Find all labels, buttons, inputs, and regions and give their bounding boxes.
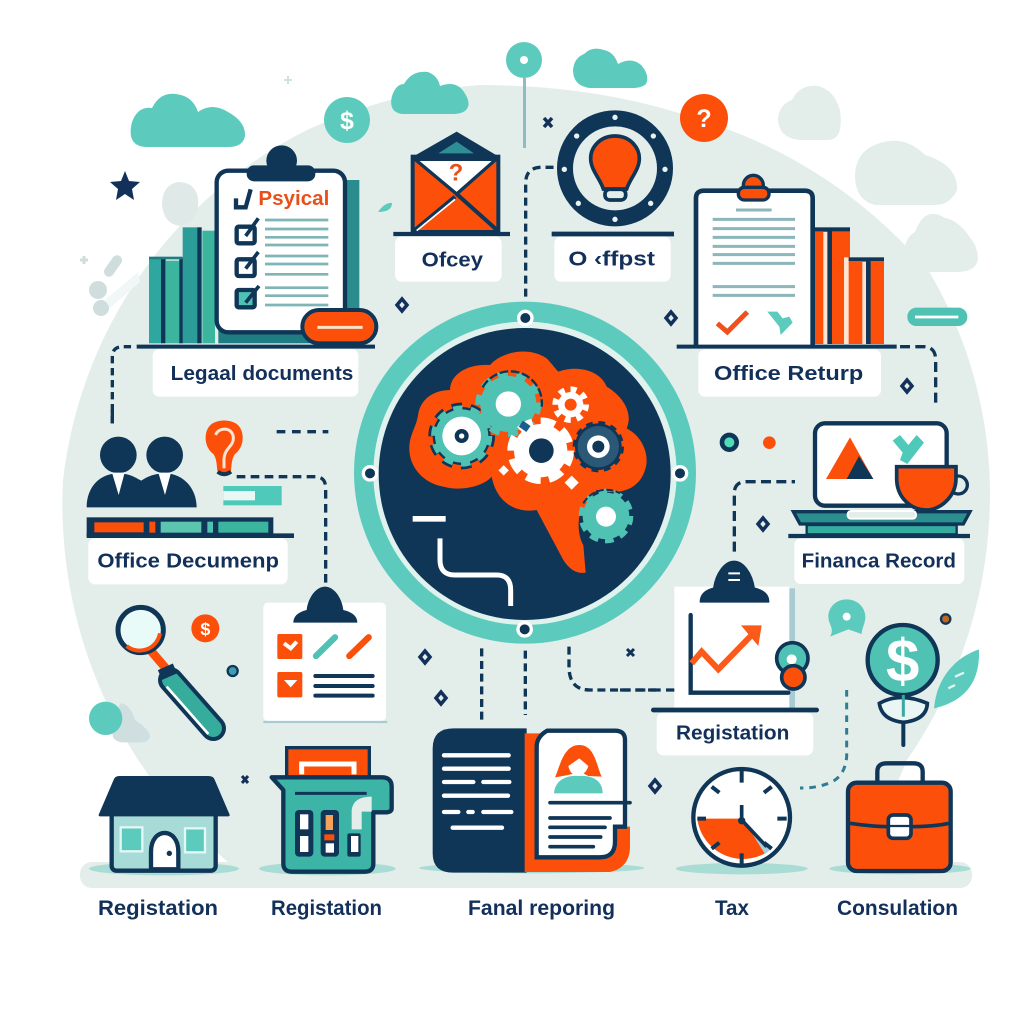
cloud: top centre right teal — [573, 49, 647, 88]
axes — [691, 615, 788, 693]
panel: legal documents — [112, 145, 376, 423]
label: ofcey: Ofcey — [422, 249, 484, 272]
clipboard heading: Psyical — [258, 187, 329, 210]
clipboard — [217, 171, 345, 332]
label: finance record — [794, 538, 964, 584]
shelf — [788, 529, 970, 542]
clip — [738, 175, 769, 200]
panel: office document — [87, 410, 328, 584]
books — [149, 180, 359, 343]
chart logo — [826, 437, 873, 479]
orange spine — [525, 733, 630, 872]
pale sparkle — [284, 76, 292, 84]
icon: coin — [191, 614, 219, 642]
ring — [565, 118, 665, 218]
speech bubble — [828, 599, 865, 637]
label: finance record: Financa Record — [802, 550, 956, 572]
label: registration 1: Registation — [98, 897, 218, 920]
connector short — [277, 427, 328, 437]
orange books — [813, 227, 884, 344]
brain — [409, 352, 647, 573]
label: registration panel: Registation — [676, 722, 789, 744]
dot — [941, 614, 950, 624]
bell clip — [293, 587, 357, 623]
question badge — [680, 94, 728, 142]
pale marks left — [80, 253, 124, 316]
briefcase — [848, 763, 951, 871]
teal check — [893, 435, 924, 464]
house — [100, 777, 228, 871]
connector — [112, 347, 135, 423]
label: registration panel — [657, 713, 813, 755]
label: final reporting: Fanal reporing — [468, 897, 615, 920]
envelope peak — [412, 132, 500, 157]
cloud: pale left — [162, 182, 198, 226]
leaf — [934, 649, 979, 708]
panel: finance record — [722, 423, 970, 584]
envelope folds — [414, 194, 498, 231]
label: tax: Tax — [715, 897, 749, 920]
portrait — [554, 745, 603, 793]
ticks — [316, 637, 335, 656]
bell slots — [728, 573, 740, 580]
star — [110, 171, 140, 200]
chart board — [674, 562, 808, 712]
ground shadows — [89, 862, 396, 875]
connector teal — [800, 690, 847, 788]
label: offpst: O ‹ffpst — [568, 248, 655, 270]
shelf — [677, 341, 897, 353]
icon: dollar badge: $ — [340, 107, 354, 135]
coffee cup — [897, 467, 967, 510]
shelf — [653, 703, 817, 717]
pale streak left — [105, 272, 140, 308]
outer ring — [354, 302, 696, 644]
label: office document: Office Decumenp — [97, 550, 279, 572]
question badge: ? — [696, 105, 712, 133]
dark disc — [379, 328, 671, 620]
light ring — [373, 322, 677, 625]
list lines — [315, 676, 373, 696]
grey cloud — [113, 703, 150, 742]
ring nodes — [363, 311, 687, 636]
trend arrow — [692, 633, 753, 669]
connector — [526, 167, 557, 297]
gear: top teal — [478, 371, 542, 434]
status dots — [722, 435, 776, 450]
cloud: pale right 1 — [778, 86, 841, 140]
white sparks — [498, 465, 579, 490]
book stack — [87, 517, 273, 537]
cover text lines — [444, 755, 511, 828]
small teal leaf — [378, 203, 392, 212]
cloud: top left teal — [131, 94, 245, 147]
folder calculator — [272, 748, 392, 872]
page — [537, 731, 625, 857]
x marker top — [544, 118, 552, 127]
connector upper stub — [107, 410, 117, 423]
gear: dark — [575, 423, 622, 470]
label: ofcey — [395, 237, 502, 282]
label: registration 2: Registation — [271, 897, 382, 920]
bulb — [206, 420, 243, 474]
gear: lower teal — [581, 490, 631, 541]
bulb base — [605, 189, 626, 200]
clipboard — [696, 191, 813, 345]
shelf — [137, 341, 375, 353]
panel: lightbulb — [526, 115, 674, 297]
list lines — [265, 220, 328, 305]
background blob — [62, 85, 990, 872]
dollar plant — [868, 625, 938, 745]
teal bar — [223, 486, 282, 505]
teal circle — [89, 702, 122, 735]
connectors — [482, 647, 660, 722]
orange pill — [302, 310, 376, 343]
dark cover — [433, 728, 527, 873]
teal check — [767, 312, 793, 335]
toggle dots — [777, 643, 808, 674]
checklist board — [263, 587, 387, 722]
panel: lower right icons — [620, 562, 979, 874]
check boxes — [277, 634, 302, 697]
label: legal documents: Legaal documents — [171, 362, 353, 385]
envelope body — [413, 157, 498, 232]
envelope flap — [415, 159, 496, 194]
cloud: pale right 3 — [904, 214, 978, 272]
face mark — [413, 516, 446, 522]
icon: coin: $ — [200, 619, 210, 639]
label: office return: Office Returp — [714, 362, 863, 385]
neck line — [440, 538, 511, 606]
central brain circle — [354, 302, 696, 644]
clock — [693, 769, 790, 866]
icon: dollar badge — [324, 97, 370, 143]
people — [87, 437, 197, 507]
bottom strip — [80, 862, 972, 888]
laptop screen — [815, 423, 947, 506]
panel: final report book — [419, 647, 660, 873]
panel: lower left icons — [89, 587, 396, 875]
clip — [247, 145, 315, 181]
gear: small white — [555, 389, 586, 420]
bulb — [591, 136, 639, 189]
label: office document — [88, 538, 288, 584]
panel: office return — [677, 175, 967, 407]
shelf — [393, 227, 510, 240]
ring studs — [562, 115, 668, 222]
bottom labels — [98, 897, 958, 920]
connector — [900, 347, 936, 407]
document lines — [713, 210, 795, 295]
dot — [228, 666, 238, 676]
pin marker — [506, 42, 542, 148]
decorative clouds and markers — [80, 42, 978, 792]
bell clip — [701, 562, 768, 602]
checkboxes — [237, 218, 259, 307]
ground shadows — [676, 863, 971, 874]
orange check — [717, 312, 747, 332]
label: office return — [698, 349, 881, 397]
magnifier — [118, 607, 213, 734]
dollar plant: $ — [886, 628, 919, 695]
page lines — [550, 803, 630, 847]
label: offpst — [554, 237, 671, 282]
label: consultation: Consulation — [837, 897, 958, 920]
fold highlight — [417, 199, 455, 231]
label: legal documents — [153, 349, 358, 397]
gear: left teal — [432, 407, 491, 465]
connector — [620, 685, 675, 695]
teal pill — [907, 308, 967, 326]
connector long — [237, 477, 326, 583]
diamonds — [397, 299, 912, 792]
cloud: pale right 2 — [855, 141, 957, 205]
gear: main white — [511, 421, 570, 480]
panel: envelope — [393, 132, 510, 282]
x markers — [242, 649, 634, 783]
shelf — [87, 529, 294, 543]
connector — [734, 482, 795, 552]
cloud: top centre left teal — [391, 72, 469, 114]
laptop base — [793, 511, 970, 534]
ground shadow — [419, 863, 644, 873]
shelf — [552, 227, 674, 241]
heading check — [236, 189, 251, 207]
question mark: ? — [449, 160, 463, 187]
